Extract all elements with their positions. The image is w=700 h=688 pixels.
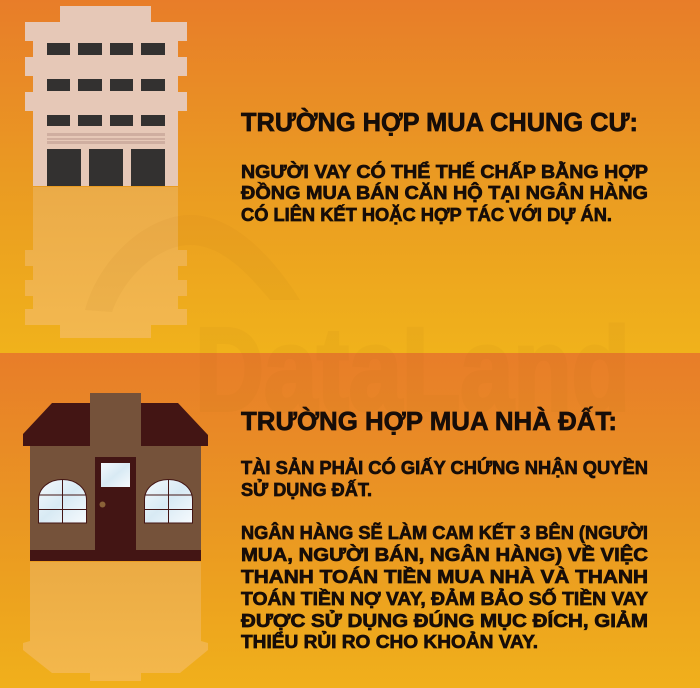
text block: three-party commitment: NGÂN HÀNG SẼ LÀM CAM KẾT 3 BÊN (NGƯỜI xyxy=(241,522,648,543)
heading: house: TRƯỜNG HỢP MUA NHÀ ĐẤT: xyxy=(241,406,617,436)
text block: land certificate: TÀI SẢN PHẢI CÓ GIẤY CHỨNG NHẬN QUYỀN xyxy=(241,457,648,478)
left window xyxy=(38,480,86,523)
text block: apartment: NGƯỜI VAY CÓ THỂ THẾ CHẤP BẰNG HỢP xyxy=(241,161,648,182)
text block: land certificate: SỬ DỤNG ĐẤT. xyxy=(241,479,372,500)
text block: three-party commitment: ĐƯỢC SỬ DỤNG ĐÚNG MỤC ĐÍCH, GIẢM xyxy=(241,610,648,631)
apartment reflection xyxy=(25,187,187,338)
text block: three-party commitment xyxy=(241,522,648,652)
panel: house case xyxy=(0,353,700,688)
text block: three-party commitment: THIỂU RỦI RO CHO KHOẢN VAY. xyxy=(241,631,538,652)
text block: apartment: ĐỒNG MUA BÁN CĂN HỘ TẠI NGÂN HÀNG xyxy=(241,182,648,203)
door xyxy=(95,457,136,552)
text block: three-party commitment: THANH TOÁN TIỀN MUA NHÀ VÀ THANH xyxy=(241,566,648,587)
icon: house xyxy=(23,393,208,561)
text block: three-party commitment: TOÁN TIỀN NỢ VAY, ĐẢM BẢO SỐ TIỀN VAY xyxy=(241,588,648,609)
text block: three-party commitment: MUA, NGƯỜI BÁN, NGÂN HÀNG) VỀ VIỆC xyxy=(241,544,648,565)
panel: apartment case xyxy=(0,0,700,353)
text block: land certificate xyxy=(241,457,648,500)
heading: apartment: TRƯỜNG HỢP MUA CHUNG CƯ: xyxy=(241,107,638,137)
text block: apartment xyxy=(241,161,648,225)
watermark xyxy=(85,215,630,436)
house reflection xyxy=(23,562,208,681)
icon: apartment building xyxy=(25,6,187,186)
text block: apartment: CÓ LIÊN KẾT HOẶC HỢP TÁC VỚI DỰ ÁN. xyxy=(241,204,612,225)
right window xyxy=(144,480,192,523)
